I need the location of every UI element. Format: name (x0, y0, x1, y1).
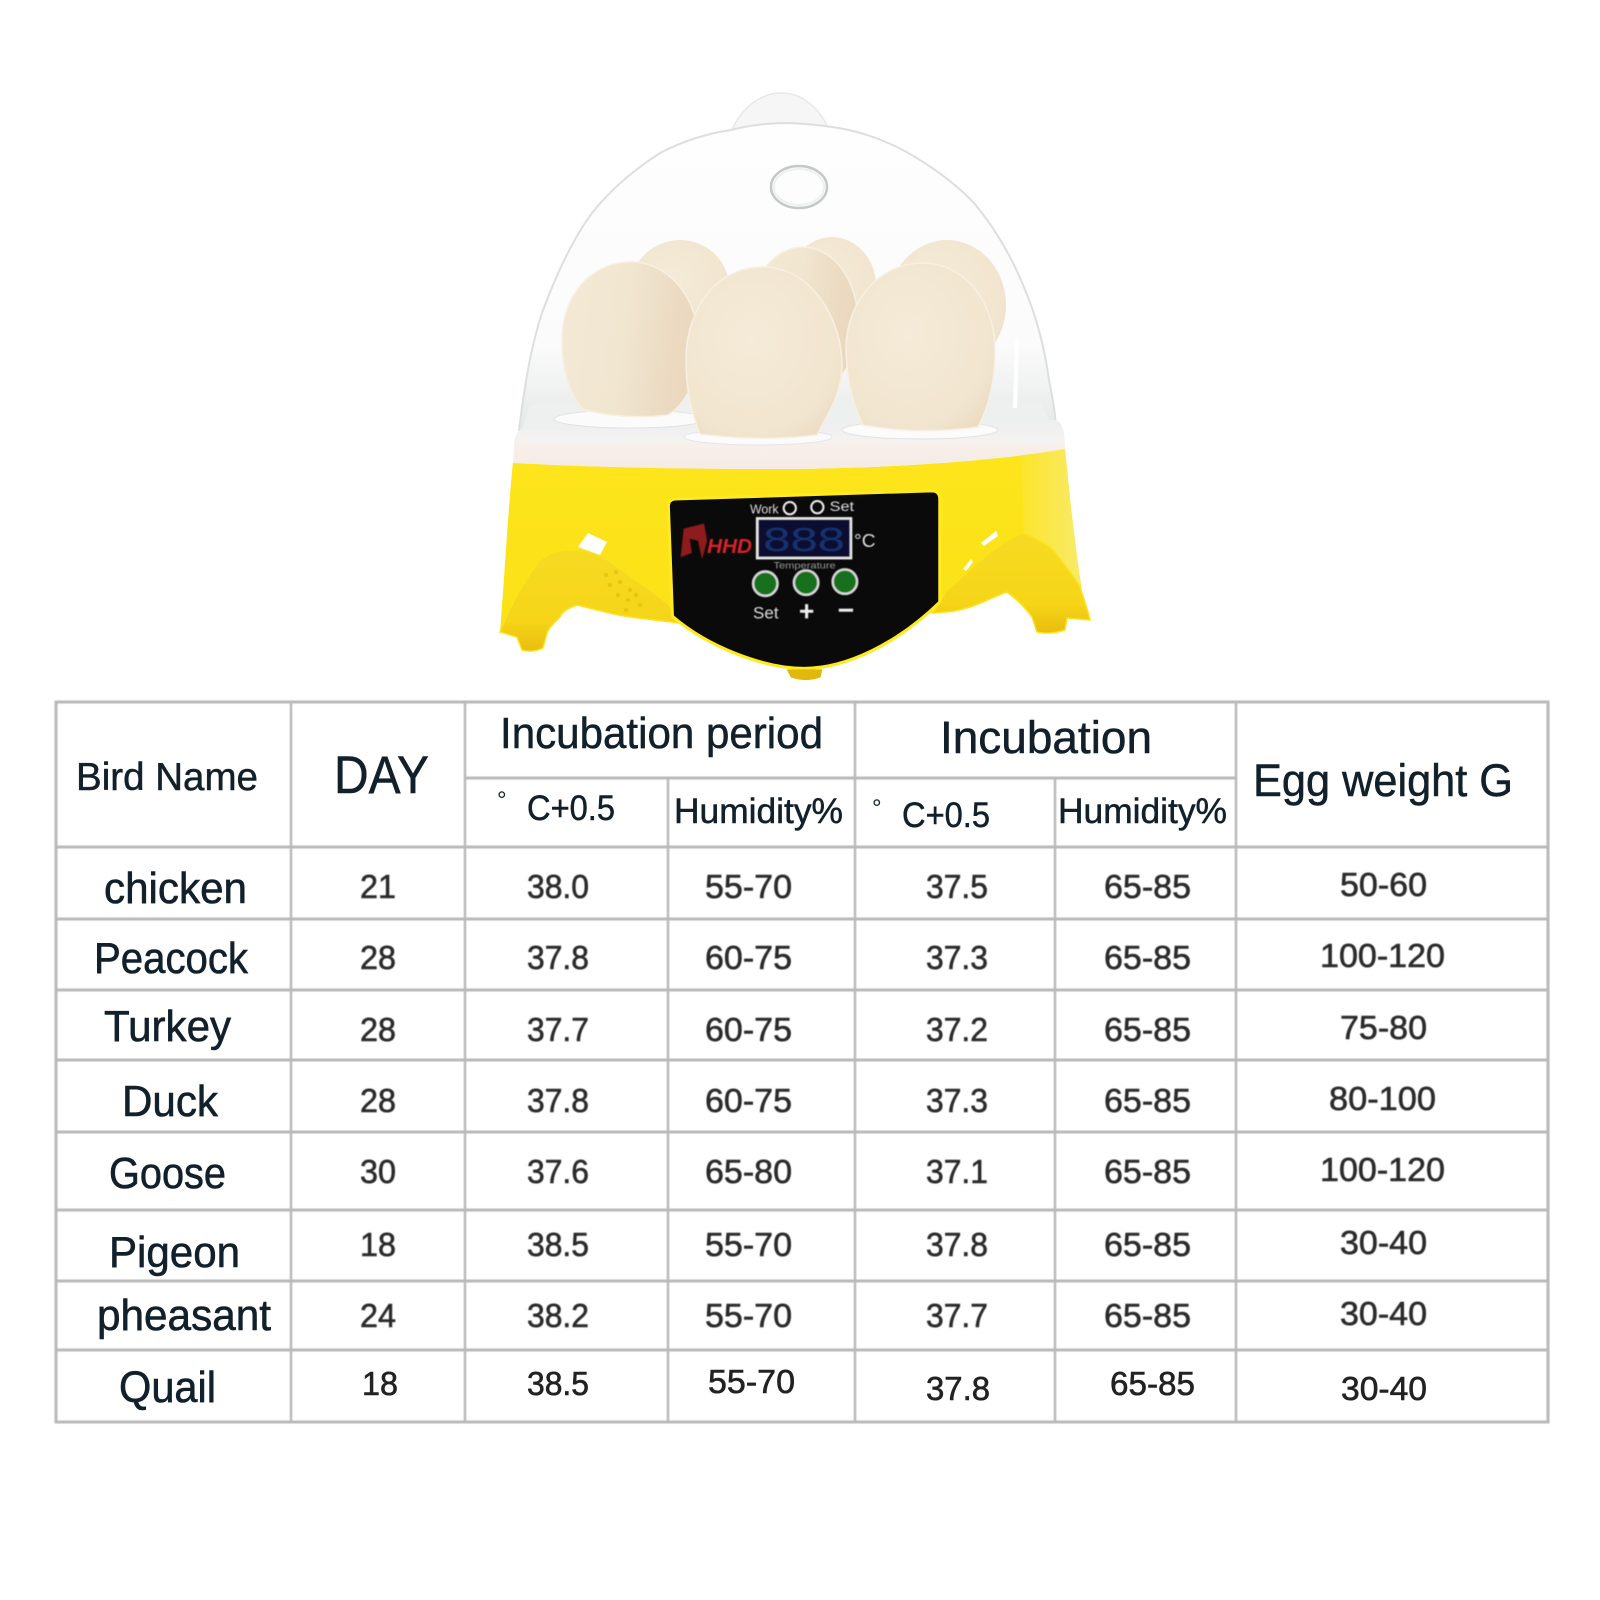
front right egg (846, 263, 995, 431)
row: turkey: 37.7 (527, 1011, 589, 1048)
row: pheasant: 24 (360, 1297, 396, 1334)
transparent dome (519, 123, 1056, 430)
row: chicken: 38.0 (527, 868, 589, 905)
dome knob (731, 93, 829, 132)
incubation humidity subheading: Humidity% (1058, 792, 1227, 831)
row: goose: 65-80 (705, 1153, 792, 1190)
tray turning bar (1015, 340, 1017, 408)
day heading: DAY (334, 746, 429, 805)
row: chicken: 21 (360, 868, 396, 905)
row: duck: 65-85 (1104, 1082, 1191, 1119)
incubator product photo (500, 93, 1090, 680)
row: duck: 60-75 (705, 1082, 792, 1119)
row: pheasant: 37.7 (926, 1297, 988, 1334)
row: peacock: 60-75 (705, 939, 792, 976)
set label: Set (830, 499, 854, 515)
bottom foot (787, 669, 822, 680)
row: turkey: 37.2 (926, 1011, 988, 1048)
row: goose: 37.6 (527, 1153, 589, 1190)
row: pheasant: 38.2 (527, 1297, 589, 1334)
temperature label: Temperature (773, 560, 836, 570)
yellow base body (500, 449, 1080, 632)
row: turkey: 75-80 (1340, 1009, 1427, 1046)
row: duck: 37.3 (926, 1082, 988, 1119)
period temperature subheading: ° (497, 787, 507, 814)
row: turkey: Turkey (104, 1002, 231, 1051)
row: pheasant: 55-70 (705, 1297, 792, 1334)
egg tray (522, 399, 1052, 445)
row: peacock: 100-120 (1320, 937, 1445, 974)
row: chicken: 65-85 (1104, 868, 1191, 905)
back eggs (631, 237, 1006, 397)
pale body edge at right (1020, 449, 1082, 590)
row: pigeon (109, 1224, 1427, 1277)
incubation period heading: Incubation period (500, 709, 823, 758)
row: peacock (94, 934, 1445, 983)
incubation temperature subheading: ° (872, 795, 882, 822)
row: turkey: 60-75 (705, 1011, 792, 1048)
degree symbol: °C (854, 530, 876, 551)
row: turkey: 28 (360, 1011, 396, 1048)
row: goose: Goose (109, 1149, 226, 1198)
left leg (500, 550, 688, 651)
row: pigeon: 38.5 (527, 1226, 589, 1263)
row: quail: 30-40 (1341, 1370, 1427, 1407)
row: pheasant: pheasant (97, 1291, 271, 1340)
row: goose: 30 (360, 1153, 396, 1190)
row: duck: 37.8 (527, 1082, 589, 1119)
row: quail: Quail (119, 1363, 216, 1412)
display digits: 888 (763, 522, 845, 559)
minus sign (839, 609, 853, 612)
row: quail: 37.8 (926, 1370, 990, 1407)
set button label: Set (753, 604, 779, 622)
panel labels and controls (681, 499, 876, 622)
row: quail: 18 (362, 1365, 398, 1402)
table grid (56, 702, 1548, 1422)
white rim (513, 420, 1065, 469)
row: pheasant: 30-40 (1340, 1295, 1427, 1332)
row: goose: 100-120 (1320, 1151, 1445, 1188)
table header (76, 709, 1513, 835)
row: quail (119, 1363, 1427, 1412)
right leg (933, 533, 1090, 633)
work label: Work (750, 501, 779, 516)
row: goose: 65-85 (1104, 1153, 1191, 1190)
row: duck: 80-100 (1329, 1080, 1436, 1117)
row: pigeon: 18 (360, 1226, 396, 1263)
front centre egg (686, 267, 842, 438)
green buttons (753, 569, 857, 596)
row: pigeon: 65-85 (1104, 1226, 1191, 1263)
control panel (668, 491, 940, 668)
row: goose: 37.1 (926, 1153, 988, 1190)
row: pigeon: 30-40 (1340, 1224, 1427, 1261)
temperature display (757, 518, 851, 558)
egg weight heading: Egg weight G (1253, 755, 1513, 806)
row: turkey (104, 1002, 1427, 1051)
speaker grille (604, 570, 642, 612)
period temperature label: C+0.5 (527, 789, 615, 828)
plus sign (800, 604, 813, 618)
front left egg (562, 262, 699, 417)
row: chicken: chicken (104, 864, 247, 913)
incubation heading: Incubation (940, 712, 1152, 763)
row: chicken (104, 864, 1427, 913)
row: peacock: 37.3 (926, 939, 988, 976)
row: pigeon: 37.8 (926, 1226, 988, 1263)
row: quail: 65-85 (1110, 1365, 1195, 1402)
row: pigeon: 55-70 (705, 1226, 792, 1263)
row: peacock: Peacock (94, 934, 249, 983)
row: pheasant: 65-85 (1104, 1297, 1191, 1334)
incubation temperature label: C+0.5 (902, 796, 990, 835)
brand: HHD (707, 536, 752, 558)
logo (681, 523, 707, 559)
work and set lamps (784, 501, 823, 514)
row: chicken: 37.5 (926, 868, 988, 905)
row: peacock: 37.8 (527, 939, 589, 976)
row: duck: 28 (360, 1082, 396, 1119)
bird name heading: Bird Name (76, 756, 258, 799)
dome handle (771, 166, 827, 208)
period humidity subheading: Humidity% (674, 792, 843, 831)
row: pigeon: Pigeon (109, 1228, 240, 1277)
row: goose (109, 1149, 1445, 1198)
row: quail: 55-70 (708, 1363, 795, 1400)
row: quail: 38.5 (527, 1365, 589, 1402)
row: peacock: 28 (360, 939, 396, 976)
row: duck (122, 1077, 1436, 1126)
row: duck: Duck (122, 1077, 219, 1126)
row: pheasant (97, 1291, 1427, 1340)
row: chicken: 55-70 (705, 868, 792, 905)
white notches (578, 531, 998, 571)
row: turkey: 65-85 (1104, 1011, 1191, 1048)
row: peacock: 65-85 (1104, 939, 1191, 976)
row: chicken: 50-60 (1340, 866, 1427, 903)
